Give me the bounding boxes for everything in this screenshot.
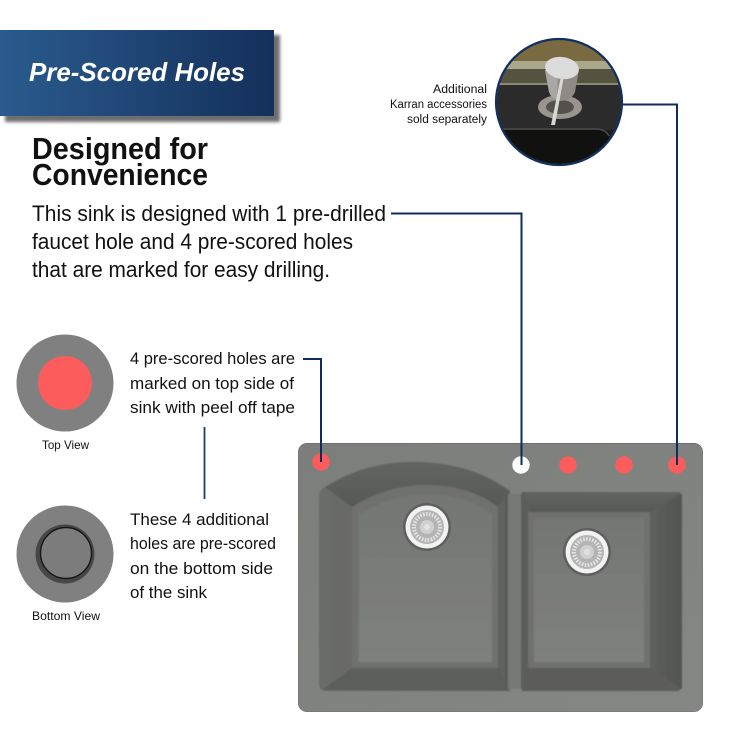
- center divider: [505, 494, 523, 689]
- sink top view: [298, 443, 703, 712]
- text: bottom side holes: of the sink: [130, 583, 207, 602]
- pre-scored holes: [312, 453, 686, 474]
- label: Top View: Top View: [42, 438, 89, 452]
- text: top side holes: 4 pre-scored holes are: [130, 349, 295, 368]
- accessories note: Additional: [433, 84, 487, 96]
- intro text block: This sink is designed with 1 pre-drilled: [32, 201, 386, 226]
- text: bottom side holes: holes are pre-scored: [130, 534, 276, 553]
- leader line: top side holes: [303, 359, 321, 462]
- text: top side holes: [130, 349, 295, 417]
- intro text block: that are marked for easy drilling.: [32, 257, 330, 282]
- text: bottom side holes: These 4 additional: [130, 510, 269, 529]
- top view circle with red tape: [16, 334, 114, 432]
- left drain: [403, 503, 451, 551]
- label: Bottom View: Bottom View: [32, 609, 100, 623]
- text: bottom side holes: [130, 510, 276, 602]
- heading: Designed for Convenience: [32, 131, 208, 192]
- heading: Designed for Convenience: Convenience: [32, 157, 208, 192]
- leader line: faucet hole: [391, 214, 522, 465]
- accessories note: sold separately: [407, 114, 487, 126]
- accessories note: [390, 84, 487, 126]
- bottom view circle with scored ring: [16, 506, 114, 602]
- right drain: [563, 528, 611, 576]
- text: top side holes: marked on top side of: [130, 374, 294, 393]
- left bowl: [319, 462, 510, 691]
- banner: Pre-Scored Holes: Pre-Scored Holes: [29, 57, 245, 87]
- pre-drilled faucet hole: [512, 456, 530, 474]
- accessory photo: soap dispenser: [495, 38, 623, 166]
- banner: Pre-Scored Holes: [0, 30, 280, 122]
- divider between view notes: [204, 427, 206, 499]
- heading: Designed for Convenience: Designed for: [32, 131, 208, 166]
- sink deck: [298, 443, 703, 712]
- intro text block: [32, 201, 386, 282]
- text: top side holes: sink with peel off tape: [130, 398, 295, 417]
- accessories note: Karran accessories: [390, 99, 487, 111]
- right bowl: [522, 492, 682, 691]
- intro text block: faucet hole and 4 pre-scored holes: [32, 229, 353, 254]
- text: bottom side holes: on the bottom side: [130, 559, 273, 578]
- leader line: accessory to hole: [623, 104, 677, 465]
